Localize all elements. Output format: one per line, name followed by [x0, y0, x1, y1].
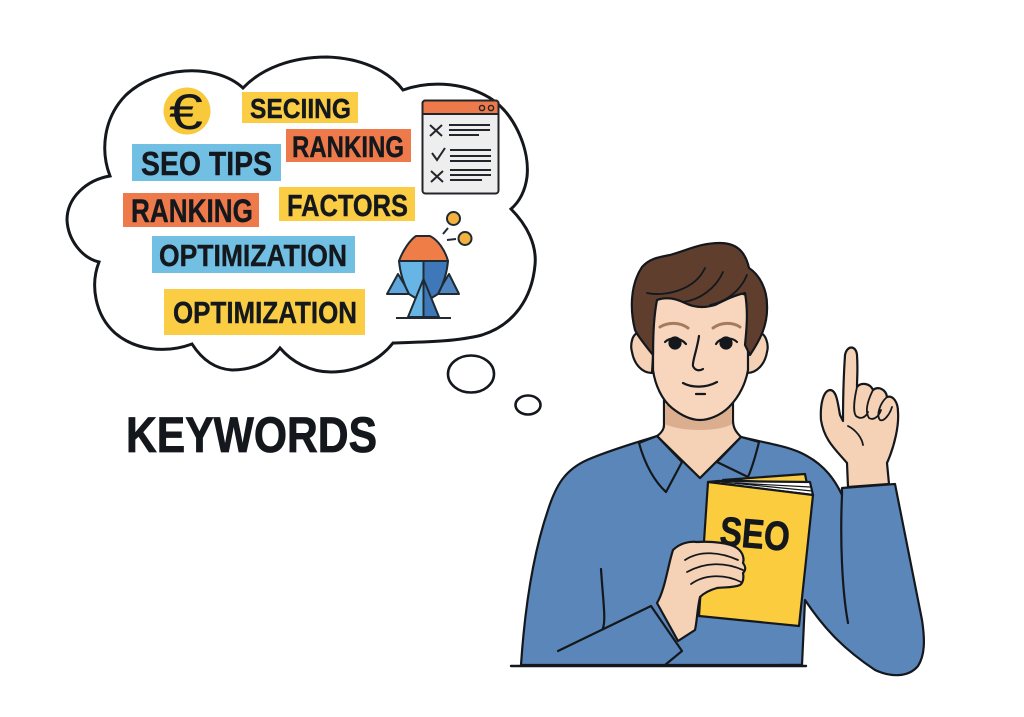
neck shadow: [665, 405, 732, 430]
tag: FACTORS: FACTORS: [287, 188, 408, 223]
collar: [639, 436, 759, 492]
holding hand: [657, 542, 745, 641]
tag: OPTIMIZATION yellow: OPTIMIZATION: [173, 295, 357, 330]
tag: OPTIMIZATION blue: OPTIMIZATION: [159, 238, 347, 273]
tag: RANKING orange lower: RANKING: [131, 193, 253, 229]
shirt body: [521, 436, 924, 675]
tag: RANKING orange top: RANKING: [292, 131, 404, 164]
hair: [632, 243, 767, 355]
mouth: [683, 382, 717, 394]
sleeve seam lines: [601, 495, 848, 628]
person with SEO book: [511, 243, 924, 675]
tag: SEO TIPS: SEO TIPS: [141, 145, 272, 182]
desk line: [511, 665, 806, 667]
front cover: [699, 482, 813, 626]
finger creases: [685, 553, 743, 584]
small thought bubble: [516, 396, 540, 414]
hair strands: [647, 268, 747, 305]
big thought bubble: [448, 356, 494, 392]
coin two: [458, 232, 472, 245]
tag: OPTIMIZATION yellow: [164, 289, 365, 335]
raised hand: [821, 348, 898, 487]
back cover: [723, 474, 807, 484]
cuff: [558, 606, 802, 665]
icon: euro coin: [164, 84, 210, 140]
finger lines: [848, 387, 892, 445]
face: [653, 285, 748, 420]
icon: euro coin: €: [169, 84, 203, 140]
eyes: [670, 338, 680, 348]
tag: SECIING: SECIING: [250, 93, 351, 124]
book: [699, 474, 813, 626]
book title SEO: SEO: [718, 508, 792, 560]
ear right: [745, 333, 768, 373]
icon: checklist window: [422, 100, 498, 194]
eyebrows: [660, 323, 740, 328]
coin one: [447, 212, 460, 225]
icon: rocket: [387, 212, 472, 318]
book pages: [708, 481, 813, 495]
ear left: [631, 333, 654, 373]
heading: KEYWORDS: KEYWORDS: [126, 407, 377, 463]
nose: [693, 336, 703, 370]
thought cloud: [67, 57, 540, 414]
neck: [657, 400, 741, 478]
